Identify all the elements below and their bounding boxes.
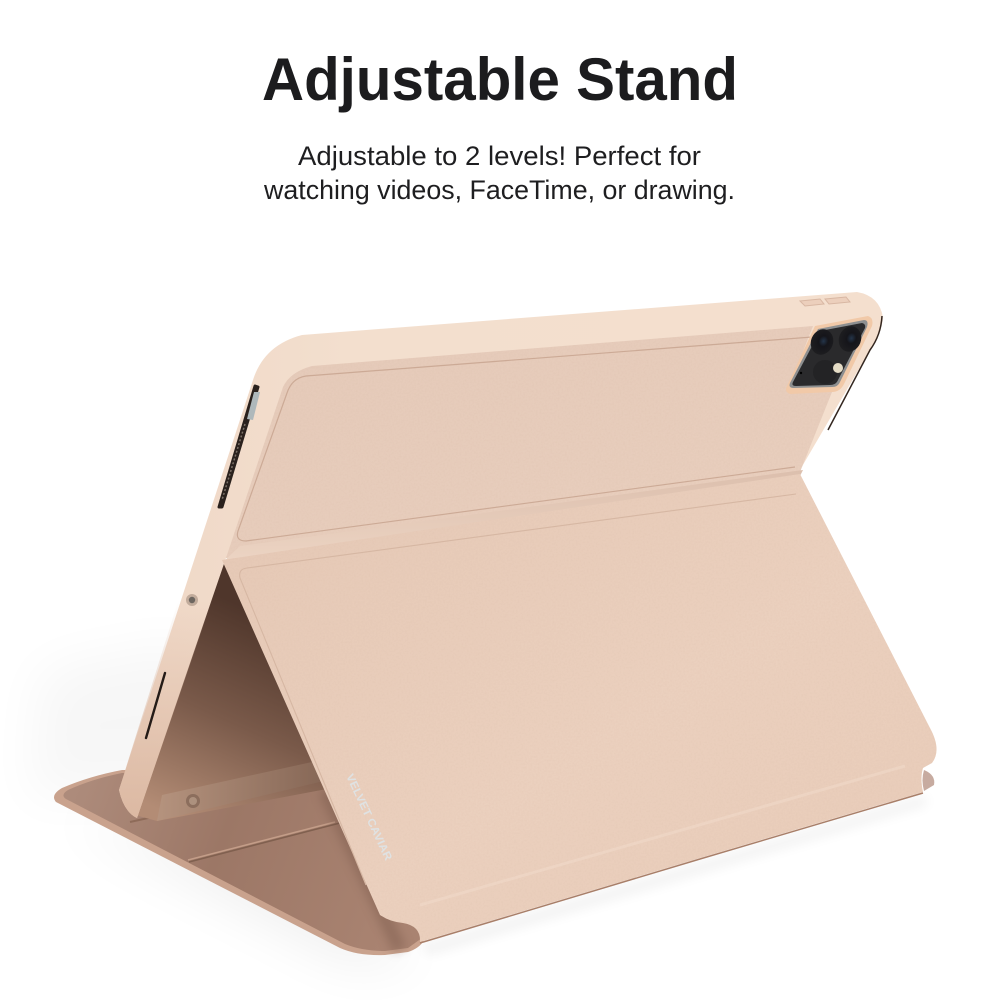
soft ground shadow	[30, 640, 928, 965]
title: Adjustable Stand	[262, 46, 738, 113]
side port lower slot	[146, 673, 165, 738]
inner support strip with magnet hole	[157, 762, 328, 821]
side port upper slot	[219, 386, 260, 507]
fold band	[224, 470, 803, 561]
brand mark: VELVET CAVIAR	[343, 772, 394, 863]
tablet case bumper	[119, 292, 883, 818]
front stand flap	[222, 474, 937, 943]
camera module	[786, 316, 872, 394]
case right edge dark line	[828, 316, 882, 430]
floor cover panel	[54, 770, 430, 955]
stand interior	[135, 535, 332, 821]
side round button	[186, 594, 198, 606]
bumper shaded lower side	[119, 595, 214, 818]
upper back leather panel	[226, 326, 832, 558]
subtitle	[263, 141, 735, 205]
subtitle: watching videos, FaceTime, or drawing.	[263, 175, 735, 205]
subtitle: Adjustable to 2 levels! Perfect for	[298, 141, 701, 171]
volume buttons	[800, 297, 850, 306]
back cover peek at corner	[922, 770, 934, 791]
